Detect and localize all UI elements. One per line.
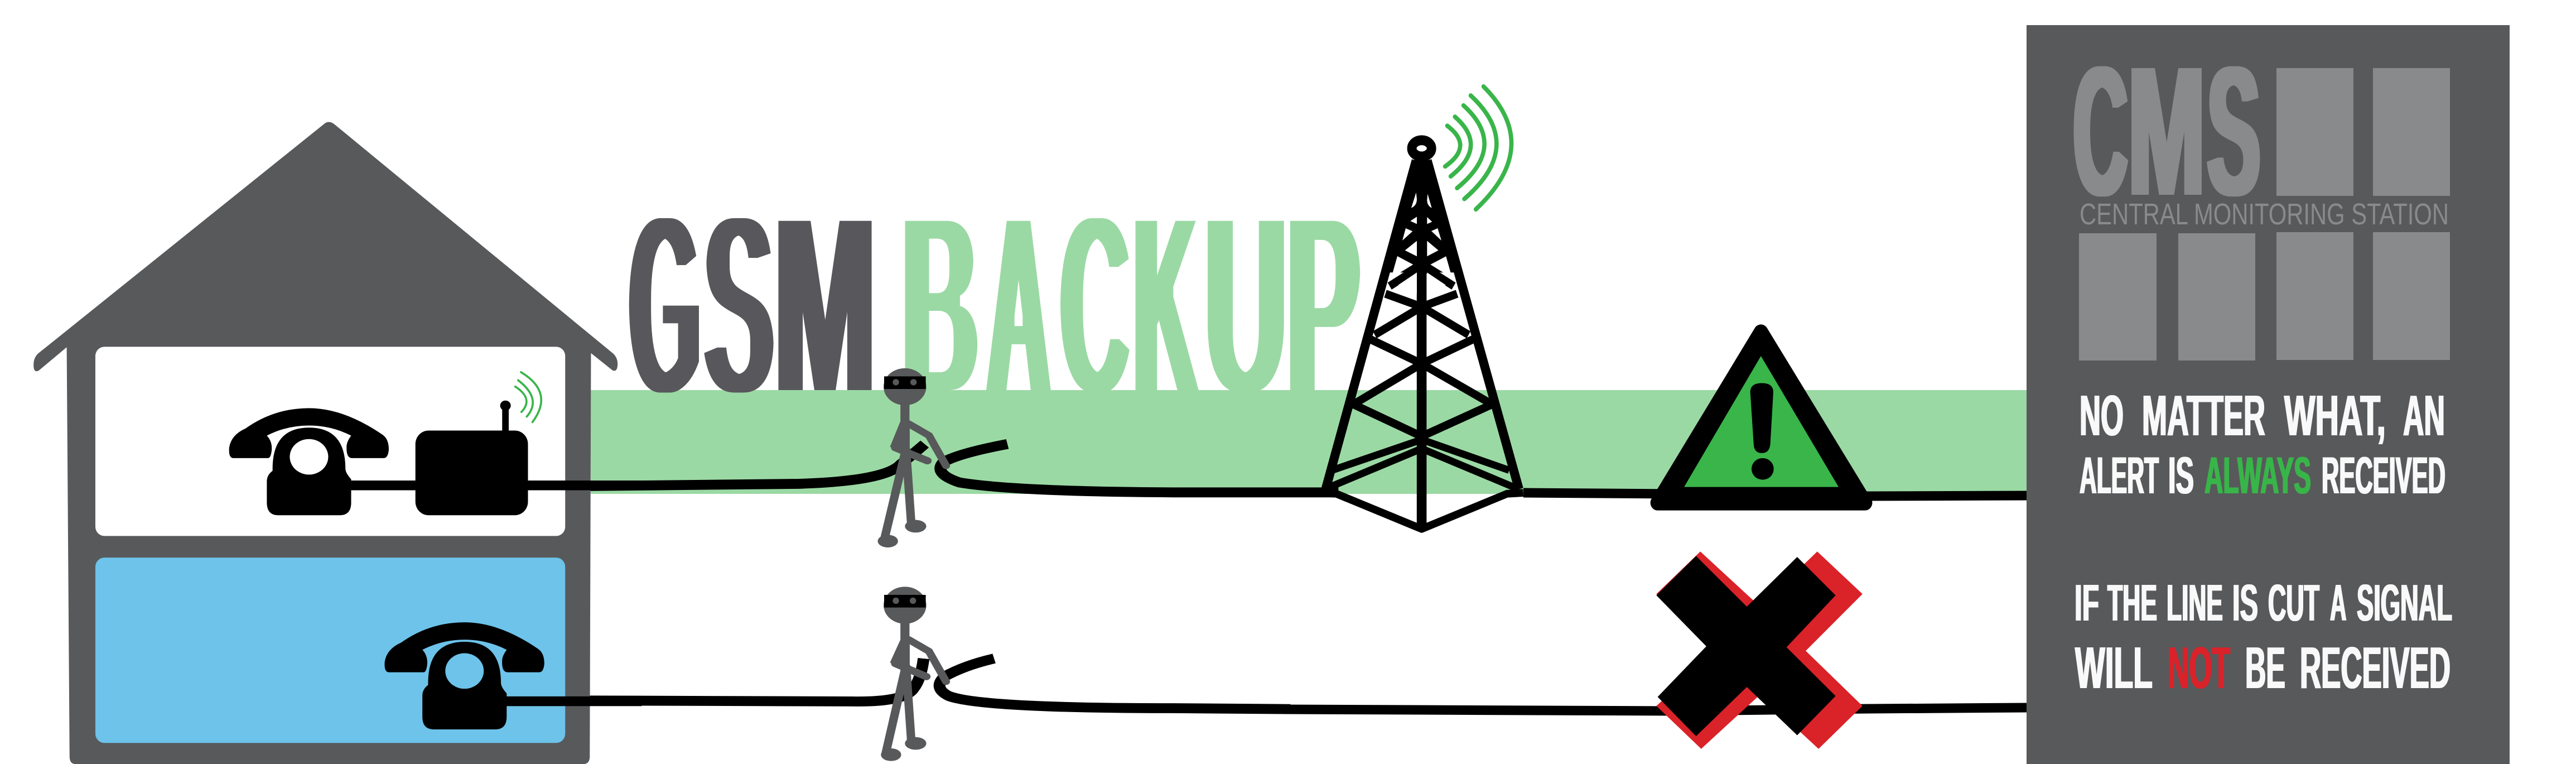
title: GSM BACKUP: M	[775, 159, 875, 450]
CMS logotype: M	[2128, 28, 2205, 234]
message: always received: IS	[2168, 446, 2194, 504]
icon: red and black X	[1656, 551, 1863, 749]
central monitoring station caption: CENTRAL MONITORING STATION	[2080, 198, 2449, 231]
message: not received: THE	[2107, 574, 2157, 632]
message: not received: IF	[2075, 574, 2099, 632]
text: P	[1287, 159, 1359, 450]
message: always received: MATTER	[2142, 383, 2265, 448]
title: GSM BACKUP	[630, 159, 1359, 450]
icon: warning triangle	[1658, 332, 1865, 503]
tower lattice	[1321, 140, 1523, 531]
top line wire: modem to station	[518, 444, 2027, 496]
icon: upper telephone	[229, 408, 389, 515]
wire: lower phone through wall	[503, 696, 641, 706]
icon: modem signal waves	[515, 372, 541, 422]
burglar: lower line	[881, 587, 946, 761]
title: GSM BACKUP: K	[1134, 159, 1198, 450]
title: GSM BACKUP: G	[630, 159, 700, 450]
panel: central monitoring station	[2027, 25, 2510, 764]
title: GSM BACKUP: U	[1205, 159, 1286, 450]
building windows	[2079, 68, 2450, 361]
green signal band	[591, 390, 2027, 494]
message: always received: ALWAYS	[2204, 446, 2311, 504]
message: not received: IS	[2232, 574, 2258, 632]
message: always received	[2080, 383, 2445, 504]
title: GSM BACKUP: S	[705, 159, 773, 450]
wire: upper phone through modem	[351, 480, 641, 490]
bottom line wire: phone to station	[580, 659, 2027, 711]
message: not received: NOT	[2168, 635, 2230, 701]
message: always received: ALERT	[2080, 446, 2159, 504]
message: not received: A	[2330, 574, 2346, 632]
icon: GSM modem	[416, 401, 528, 515]
message: always received: NO	[2080, 383, 2124, 448]
title: GSM BACKUP: A	[987, 159, 1050, 450]
message: not received: LINE	[2167, 574, 2223, 632]
panel: central monitoring station: S	[2207, 28, 2260, 234]
tower signal waves	[1445, 87, 1511, 209]
house body and roof	[33, 122, 618, 764]
panel: central monitoring station: SIGNAL	[2357, 574, 2452, 632]
icon: lower telephone	[384, 622, 544, 729]
message: not received: CUT	[2268, 574, 2319, 632]
lower room	[95, 558, 565, 743]
message: always received: AN	[2403, 383, 2445, 448]
icon: cell tower	[1321, 87, 1523, 531]
message: not received: WILL	[2075, 635, 2152, 701]
CMS logotype: C	[2073, 28, 2128, 234]
title: GSM BACKUP: B	[903, 159, 978, 450]
exclamation mark	[1750, 383, 1774, 480]
upper room	[95, 347, 565, 536]
tower top section	[1384, 158, 1463, 294]
message: always received: WHAT,	[2284, 383, 2386, 448]
house	[33, 122, 641, 764]
message: not received: BE	[2245, 635, 2285, 701]
title: GSM BACKUP: C	[1061, 159, 1129, 450]
burglar: upper line	[877, 368, 946, 547]
message: not received	[2075, 574, 2452, 701]
